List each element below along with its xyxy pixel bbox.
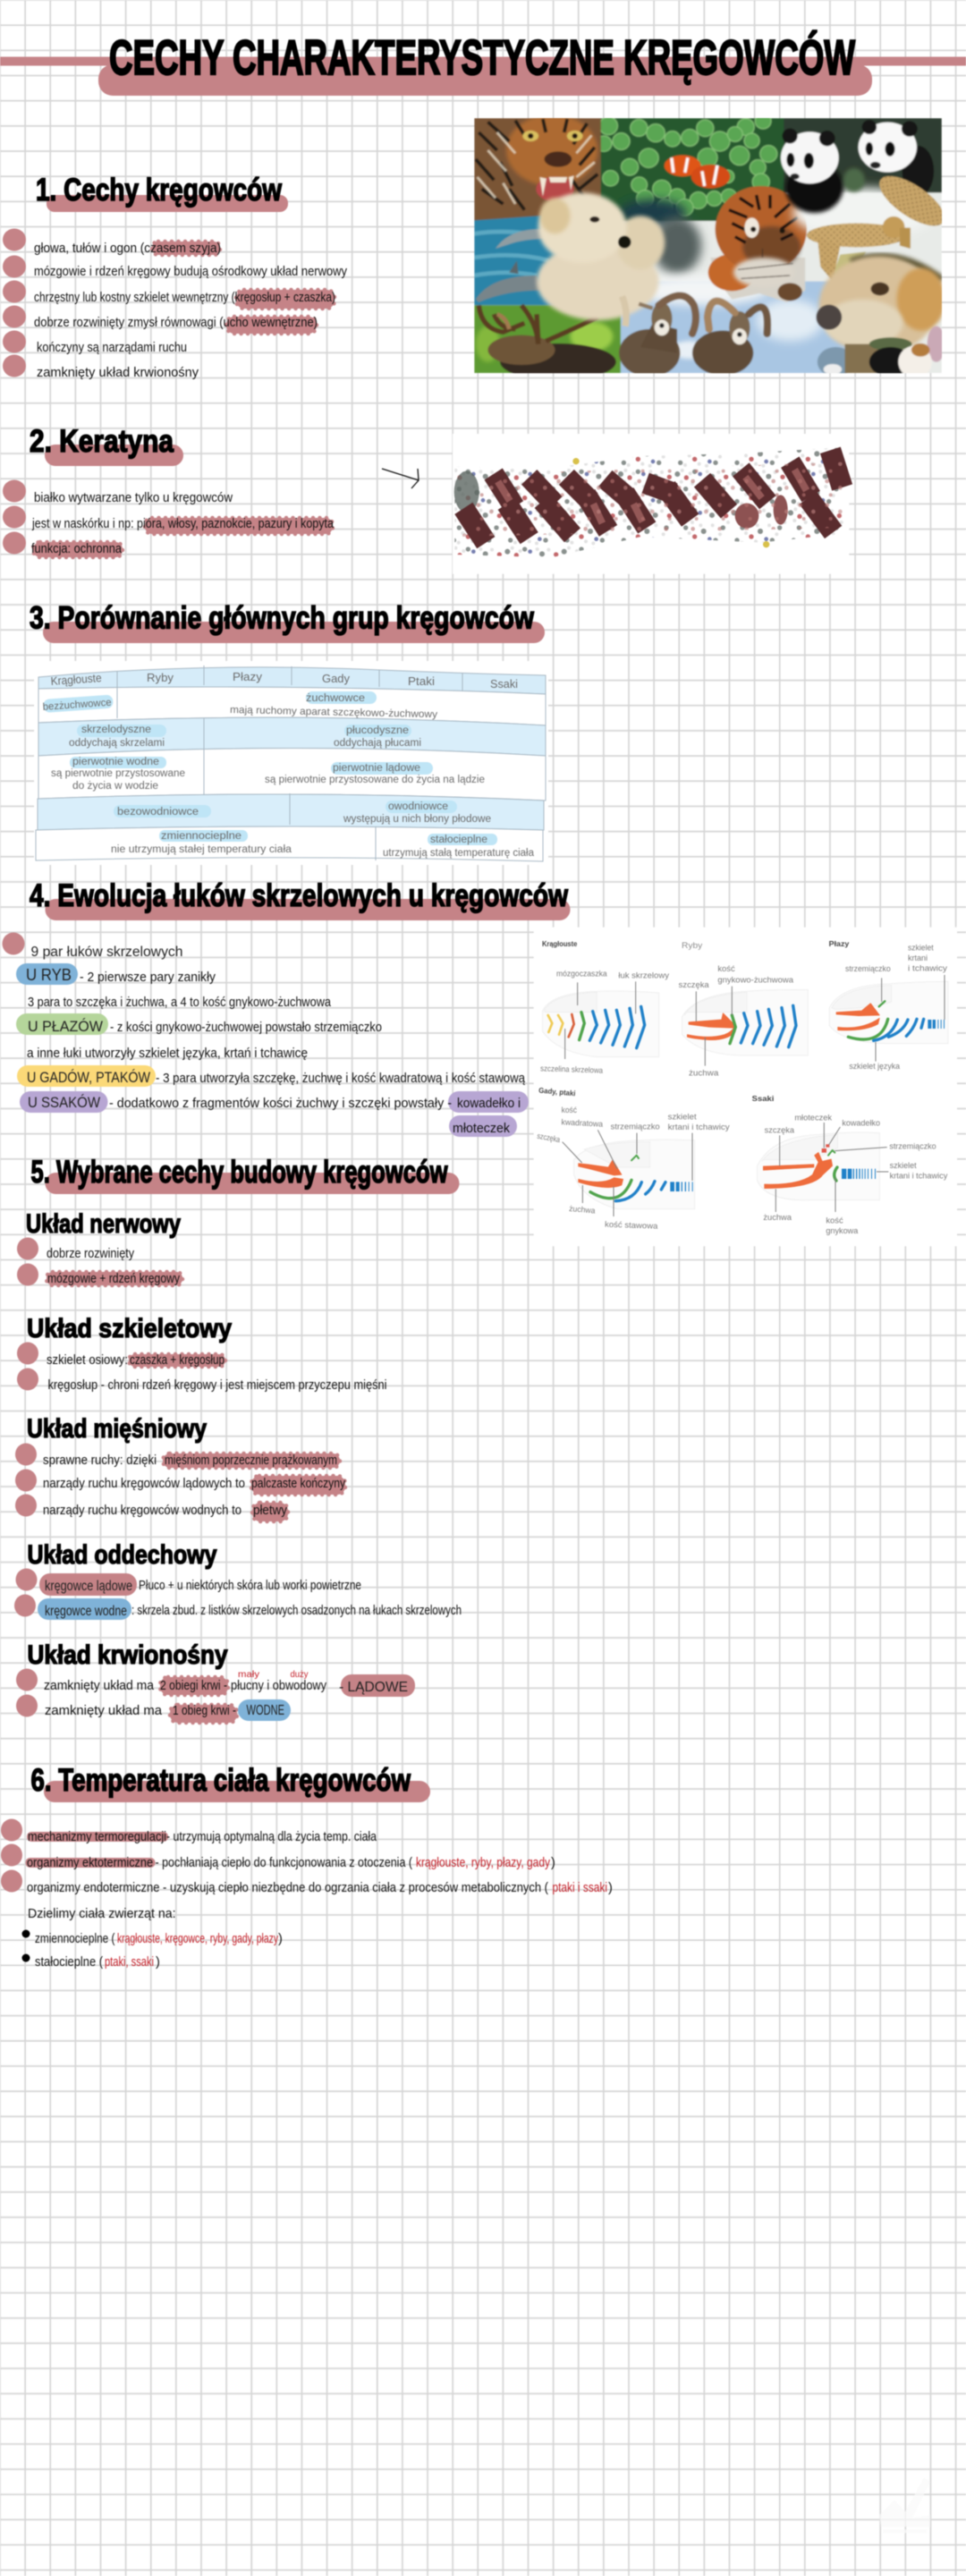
heading 2: 2. Keratyna [30,424,174,459]
subsection: układ mięśniowy: Układ mięśniowy [27,1414,207,1444]
table row: pierwotnie wodne and lądowe: pierwotnie lądowe [333,763,420,774]
text: ektotermiczne: krągłouste, ryby, płazy, gady [416,1856,551,1870]
table row: żuchwowce: mają ruchomy aparat szczękowo-żuchwowy [230,705,437,720]
subsection: układ oddechowy: Układ oddechowy [27,1540,217,1570]
subsection: układ krwionośny: WODNE [247,1703,284,1718]
table header row: Płazy [233,670,263,683]
section 3: porównanie [30,601,548,865]
section 4: ewolucja łuków skrzelowych [2,878,957,1246]
list: zmiennocieplne: zmiennocieplne ( [35,1932,115,1946]
table header row: Ssaki [490,677,518,691]
subsection: układ oddechowy: : skrzela zbud. z listków skrzelowych osadzonych na łukach skrzelowych [131,1604,462,1618]
pill and text: płazy [16,1013,382,1035]
diagram panel: ryby: szczęka [679,980,709,989]
diagram panel: ssaki: szkielet [890,1161,917,1170]
subsection: układ krwionośny: duży [290,1669,309,1680]
photo part: green anemone and clownfish [591,114,784,221]
table row: zmiennocieplne and stałocieplne: utrzymują stałą temperaturę ciała [383,848,535,859]
subsection: układ krwionośny: - LĄDOWE [339,1680,408,1695]
diagram panel: gady, ptaki: Gady, ptaki [538,1086,576,1097]
table row: pierwotnie wodne and lądowe: są pierwotnie przystosowane [51,768,185,779]
list: zmiennocieplne: krągłouste, kręgowce, ryby, gady, płazy [117,1932,279,1946]
photo part: cheetahs [807,167,953,283]
diagram panel: ssaki: szczęka [765,1126,794,1135]
text: endotermiczne: ptaki i ssaki [553,1881,607,1895]
subsection: układ mięśniowy: narządy ruchu kręgowców wodnych to [43,1504,242,1518]
section 5: wybrane cechy budowy [14,1155,462,1723]
pill and text: ssaki [20,1091,529,1137]
subsection: układ oddechowy: kręgowce wodne [45,1604,127,1619]
text: cechy list: chrzęstny lub kostny szkielet wewnętrzny (kręgosłup + czaszka) [34,291,335,305]
photo: collage of vertebrates [474,114,953,380]
table row: skrzelodyszne and płucodyszne: oddychają skrzelami [69,738,165,749]
photo part: roaring tiger [474,114,601,221]
table header row: Ryby [147,671,174,684]
table row: zmiennocieplne and stałocieplne [36,826,543,861]
table row: bezowodniowce and owodniowce: owodniowce [388,801,448,812]
subsection: układ mięśniowy: płetwy [253,1504,288,1518]
section 2: keratyna [3,424,849,574]
diagram panel: gady, ptaki: kość stawowa [605,1220,658,1231]
table row: bezowodniowce and owodniowce: występują u nich błony płodowe [343,814,491,825]
pill and text: ssaki: kowadełko i [457,1097,521,1111]
diagram panel: ssaki: krtani i tchawicy [890,1171,948,1180]
text: ektotermiczne: - pochłaniają ciepło do funkcjonowania z otoczenia ( [156,1856,412,1870]
diagram panel: gady, ptaki: kwadratowa [561,1117,603,1129]
diagram panel: płazy: szkielet [908,943,934,952]
text: ektotermiczne [25,1856,555,1870]
bullet marker [2,932,25,955]
text: termoregulacja [27,1830,377,1844]
pill and text: ssaki: młoteczek [453,1122,511,1136]
faint watermark icon [879,2478,930,2533]
text: cechy list [34,242,348,380]
text: keratyna list: funkcja: ochronna [31,542,123,556]
diagram panel: ryby: kość [717,964,735,973]
heading 4 [30,878,571,920]
diagram panel: gady, ptaki: strzemiączko [611,1122,660,1131]
photo part: bottom blue sky [619,275,854,377]
diagram panel: płazy: szkielet języka [849,1062,900,1071]
table row: żuchwowce [38,687,546,725]
subsection: układ mięśniowy: mięśniom poprzecznie prążkowanym [165,1453,337,1468]
subsection: układ nerwowy [17,1209,182,1286]
pill and text: ssaki: U SSAKÓW [28,1094,100,1111]
text: endotermiczne: organizmy endotermiczne - uzyskują ciepło niezbędne do ogrzania ciała z procesów metabolicznych ( [27,1881,548,1895]
table row: bezowodniowce and owodniowce: bezowodniowce [117,807,199,818]
diagram panel: ssaki: strzemiączko [889,1142,936,1151]
diagram panel: krągłouste: Krągłouste [542,939,578,948]
table row: skrzelodyszne and płucodyszne [38,717,546,756]
list: stałocieplne: stałocieplne ( [35,1955,103,1970]
subsection: układ krwionośny: zamknięty układ ma [45,1704,163,1718]
diagram panel: ryby: Ryby [682,941,703,950]
bullet markers [1,1819,22,1893]
subsection: układ krwionośny: mały [238,1669,260,1680]
list: zmiennocieplne [21,1930,283,1946]
photo part: rams [619,295,767,377]
heading 3: 3. Porównanie głównych grup kręgowców [30,601,535,635]
text: endotermiczne: ) [608,1881,613,1895]
photo part: dark forest behind pandas [775,118,942,192]
pill and text: ryby: - 2 pierwsze pary zanikły [80,970,216,985]
diagram panel: krągłouste [540,939,670,1075]
diagram panel: gady, ptaki: żuchwa [569,1204,596,1216]
pill and text: gady, ptaki [17,1065,526,1087]
diagram panel: ssaki: młoteczek [794,1114,833,1123]
diagram panel: płazy: strzemiączko [845,964,891,973]
text: termoregulacja: mechanizmy termoregulacji [28,1830,166,1844]
photo part: golden dog [816,256,945,354]
text: keratyna list: białko wytwarzane tylko u kręgowców [34,491,233,505]
table: vertebrate groups comparison [34,661,548,865]
photo part: white mist on the right [793,188,933,238]
subsection: układ szkieletowy: kręgosłup - chroni rdzeń kręgowy i jest miejscem przyczepu mięśni [48,1378,386,1393]
subsection: układ krwionośny: 1 obieg krwi - [173,1704,236,1718]
subsection: układ szkieletowy: szkielet osiowy: [47,1353,128,1368]
subsection: układ mięśniowy: narządy ruchu kręgowców lądowych to [43,1477,245,1491]
diagram panel: gady, ptaki [537,1086,730,1231]
subsection: układ szkieletowy: Układ szkieletowy [27,1314,232,1343]
heading 5: 5. Wybrane cechy budowy kręgowców [30,1155,448,1190]
subsection: układ oddechowy: Płuco + u niektórych skóra lub worki powietrzne [139,1579,361,1593]
subsection: układ oddechowy [14,1540,462,1620]
table header row: Gady [322,672,350,685]
diagram: evolution of gill arches [534,928,957,1246]
heading 6: 6. Temperatura ciała kręgowców [30,1763,411,1798]
diagram panel: ryby [679,941,808,1078]
pill and text: płazy: U PŁAZÓW [28,1018,103,1035]
text: cechy list: zamknięty układ krwionośny [37,366,199,380]
bullet markers [3,229,26,377]
subsection: układ oddechowy: kręgowce lądowe [45,1579,132,1594]
subsection: układ szkieletowy [17,1314,386,1393]
heading 5 [30,1155,460,1194]
list: zmiennocieplne: ) [278,1932,283,1946]
subsection: układ szkieletowy: czaszka + kręgosłup [130,1353,225,1368]
text: cechy list: dobrze rozwinięty zmysł równowagi (ucho wewnętrzne) [34,316,318,330]
list: stałocieplne: ptaki, ssaki [105,1955,154,1970]
bullet markers [3,479,26,555]
pill and text: ryby [16,963,216,985]
photo part: moose in greenery [474,305,621,380]
table row: skrzelodyszne and płucodyszne: oddychają płucami [334,738,421,749]
text: cechy list: kończyny są narządami ruchu [37,341,187,355]
table row: skrzelodyszne and płucodyszne: płucodyszne [346,725,409,736]
table row: zmiennocieplne and stałocieplne: zmiennocieplne [161,831,242,842]
diagram panel: płazy [829,939,948,1071]
photo part: puppy [537,192,665,326]
diagram panel: krągłouste: szczelina skrzelowa [540,1063,603,1075]
table header row [38,665,546,694]
subsection: układ mięśniowy [15,1414,346,1521]
diagram panel: gady, ptaki: szkielet [668,1112,697,1121]
subsection: układ krwionośny: 2 obiegi krwi - [160,1679,227,1693]
diagram panel: gady, ptaki: szczęka [537,1131,561,1144]
heading 1: 1. Cechy kręgowców [36,173,283,208]
table row: skrzelodyszne and płucodyszne: skrzelodyszne [81,724,151,735]
text: ektotermiczne: ) [551,1856,555,1870]
table header row: Krągłouste [50,671,102,688]
diagram panel: ssaki: kowadełko [842,1119,880,1128]
subsection: układ krwionośny: zamknięty układ ma [44,1679,155,1693]
diagram panel: krągłouste: mózgoczaszka [556,970,607,979]
diagram panel: ryby: żuchwa [689,1069,718,1078]
diagram panel: gady, ptaki: krtani i tchawicy [668,1123,730,1131]
subsection: układ nerwowy: Układ nerwowy [26,1209,181,1239]
diagram panel: płazy: Płazy [829,939,850,948]
diagram panel: ssaki [752,1094,948,1235]
text: 9 par łuków: 9 par łuków skrzelowych [30,945,182,960]
pill and text: gady, ptaki: U GADÓW, PTAKÓW [27,1069,150,1086]
photo part: water and dolphins [474,215,556,307]
subsection: układ krwionośny [16,1640,415,1723]
text: keratyna list: jest w naskórku i np: pióra, włosy, paznokcie, pazury i kopyta [31,517,335,531]
pill and text: płazy: - z kości gnykowo-żuchwowej powstało strzemiączko [110,1021,382,1035]
text: podział zwierząt: Dzielimy ciała zwierząt na: [28,1907,175,1921]
subsection: układ nerwowy: mózgowie + rdzeń kręgowy [47,1272,181,1286]
subsection: układ krwionośny: płucny i obwodowy [231,1679,327,1693]
arrow to keratin model [382,469,419,488]
text: keratyna list [31,491,335,557]
table row: pierwotnie wodne and lądowe [38,748,546,801]
pill and text: gady, ptaki: - 3 para utworzyła szczękę, żuchwę i kość kwadratową i kość stawową [156,1072,526,1086]
subsection: układ mięśniowy: sprawne ruchy: dzięki [43,1453,157,1468]
text: ektotermiczne: organizmy ektotermiczne [27,1856,153,1870]
pill and text: ssaki: - dodatkowo z fragmentów kości żuchwy i szczęki powstały - [109,1097,452,1111]
text: cechy list: głowa, tułów i ogon (czasem szyja) [34,242,221,256]
list: stałocieplne [21,1953,160,1970]
table header row: Ptaki [408,674,435,688]
diagram panel: ssaki: żuchwa [763,1213,792,1222]
heading 4: 4. Ewolucja łuków skrzelowych u kręgowców [30,878,569,913]
photo part: pandas [781,120,934,213]
pill and text: ryby: U RYB [26,966,72,984]
diagram panel: płazy: i tchawicy [908,963,948,972]
section 1: cechy kręgowców [3,173,348,380]
photo part: flowers and guinea pig [824,326,945,378]
diagram panel: ssaki: Ssaki [752,1094,774,1103]
subsection: układ krwionośny: Układ krwionośny [27,1640,228,1670]
table row: zmiennocieplne and stałocieplne: stałocieplne [430,835,487,845]
diagram panel: ssaki: gnykowa [826,1226,858,1235]
photo part: blurred shadow behind puppy [619,199,701,274]
text: 3 para: 3 para to szczęka i żuchwa, a 4 to kość gnykowo-żuchwowa [28,996,332,1010]
text: termoregulacja: - utrzymują optymalną dla życia temp. ciała [166,1830,377,1844]
table row: pierwotnie wodne and lądowe: do życia w wodzie [72,781,158,792]
table row: bezowodniowce and owodniowce [38,793,544,830]
diagram panel: gady, ptaki: kość [562,1106,577,1114]
diagram panel: ssaki: kość [826,1216,843,1224]
diagram panel: płazy: krtani [908,953,928,962]
photo part: bathing tiger [708,186,807,302]
table row: pierwotnie wodne and lądowe: pierwotnie wodne [72,757,159,767]
subsection: układ nerwowy: dobrze rozwinięty [47,1247,135,1261]
diagram panel: krągłouste: łuk skrzelowy [618,970,670,979]
list: stałocieplne: ) [156,1955,160,1970]
table row: pierwotnie wodne and lądowe: są pierwotnie przystosowane do życia na lądzie [265,775,485,785]
table row: żuchwowce: bezżuchwowce [42,698,112,713]
image: keratin helix model [453,434,849,574]
table row: zmiennocieplne and stałocieplne: nie utrzymują stałej temperatury ciała [111,844,292,855]
diagram panel: ryby: gnykowo-żuchwowa [717,975,793,984]
subsection: układ mięśniowy: palczaste kończyny [251,1477,346,1491]
text: inne łuki: a inne łuki utworzyły szkielet języka, krtań i tchawicę [27,1046,308,1061]
table row: żuchwowce: żuchwowce [306,693,365,704]
text: cechy list: mózgowie i rdzeń kręgowy budują ośrodkowy układ nerwowy [34,265,348,279]
section 6: temperatura ciała [1,1763,613,1970]
